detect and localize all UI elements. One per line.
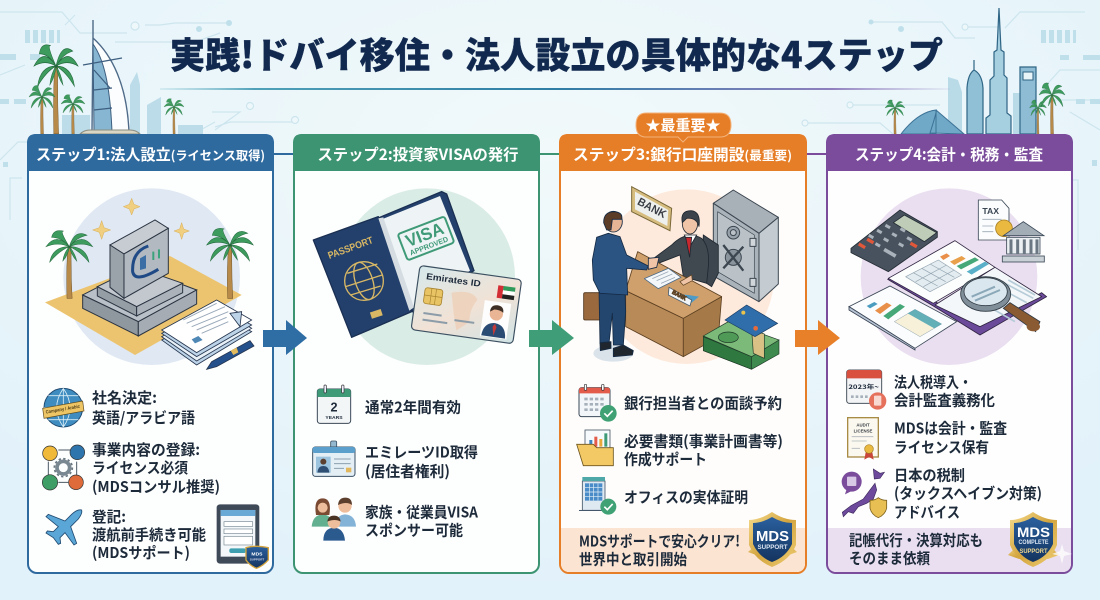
panel: step 1 xyxy=(27,134,274,573)
step 2 heading: ステップ2:投資家VISAの発行 xyxy=(318,143,518,165)
title underline xyxy=(160,88,950,90)
text: required documents: 作成サポート xyxy=(624,448,707,470)
badge: most important xyxy=(636,113,731,142)
text: business registration: ライセンス必須 xyxy=(92,457,188,478)
badge: MDS support: SUPPORT xyxy=(758,544,788,551)
title: 実践!ドバイ移住・法人設立の具体的な4ステップ xyxy=(170,27,943,79)
icon: corporate tax calendar xyxy=(847,370,886,410)
icon: calendar 2 years: 2 xyxy=(330,401,338,415)
vault xyxy=(713,190,778,302)
callout band: MDS support: 世界中と取引開始 xyxy=(579,548,687,570)
badge: MDS complete support xyxy=(1008,512,1072,567)
icon: corporate tax calendar: 2023年~ xyxy=(848,382,880,391)
text: company name: 社名決定: xyxy=(92,387,157,408)
icon: audit license: LICENSE xyxy=(854,428,872,433)
text: MDS audit license: ライセンス保有 xyxy=(894,436,989,458)
icon: business network xyxy=(42,445,85,490)
illustration: passport, visa and Emirates ID: PASSPORT xyxy=(327,235,375,262)
text: registration: (MDSサポート) xyxy=(92,542,190,563)
text: Japanese tax advice: アドバイス xyxy=(894,502,960,522)
callout band: complete support xyxy=(828,528,1071,572)
arrow: step 3 to 4 xyxy=(795,320,840,355)
badge: MDS support: MDS xyxy=(756,528,789,545)
right skyline xyxy=(885,8,1065,134)
money and cards xyxy=(703,305,779,369)
icon: calendar check xyxy=(579,384,617,422)
text: Emirates ID: エミレーツID取得 xyxy=(365,442,478,462)
icon: office building xyxy=(579,477,616,515)
tax document and bank: TAX xyxy=(982,206,999,216)
text: Japanese tax advice: 日本の税制 xyxy=(894,464,965,486)
text: MDS audit license: MDSは会計・監査 xyxy=(894,418,1007,438)
illustration: passport, visa and Emirates ID: Emirates ID xyxy=(426,271,482,289)
illustration: passport, visa and Emirates ID: VISA xyxy=(403,218,447,251)
badge: MDS complete support: COMPLETE xyxy=(1018,540,1048,546)
icon: tablet with badge: SUPPORT xyxy=(250,557,264,561)
icon: ID badge xyxy=(313,441,355,476)
text: company name: 英語/アラビア語 xyxy=(92,407,195,428)
callout band: MDS support: MDSサポートで安心クリア! xyxy=(579,530,740,552)
text: Japanese tax advice xyxy=(894,464,1042,522)
left skyline xyxy=(29,20,203,134)
icon: airplane xyxy=(46,510,82,545)
text: business registration: (MDSコンサル推奨) xyxy=(92,476,220,497)
illustration: passport, visa and Emirates ID xyxy=(313,188,522,365)
desk: BANK xyxy=(671,290,688,303)
callout band: MDS support xyxy=(561,528,805,572)
text: registration: 渡航前手続き可能 xyxy=(92,524,206,545)
text: required documents: 必要書類(事業計画書等) xyxy=(624,430,783,452)
badge: most important: ★最重要★ xyxy=(646,114,720,136)
illustration: company foundation stone xyxy=(45,188,254,369)
text: MDS audit license xyxy=(894,418,1007,458)
panel: step 2 xyxy=(293,134,540,573)
text: corporate tax xyxy=(894,372,995,410)
text: business registration xyxy=(92,439,220,497)
badge: MDS complete support: SUPPORT xyxy=(1020,548,1048,555)
badge: MDS complete support: MDS xyxy=(1017,524,1050,540)
icon: tablet with badge: MDS xyxy=(251,552,263,558)
icon: audit license: AUDIT xyxy=(856,423,870,428)
tax document and bank xyxy=(978,200,1044,262)
illustration: bank meeting xyxy=(584,187,779,369)
text: Japanese tax advice: (タックスヘイブン対策) xyxy=(894,482,1042,504)
icon: Japan map with shield xyxy=(842,469,887,518)
calculator xyxy=(851,210,937,272)
open book xyxy=(888,241,1047,335)
panel: step 3 xyxy=(559,134,807,573)
text: office proof: オフィスの実体証明 xyxy=(624,486,748,508)
step 3 heading: ステップ3:銀行口座開設(最重要) xyxy=(573,143,792,165)
icon: globe with ribbon: Company / Arabic xyxy=(45,404,81,415)
text: validity: 通常2年間有効 xyxy=(365,396,461,418)
icon: family and employees xyxy=(312,498,356,541)
illustration: passport, visa and Emirates ID: APPROVED xyxy=(408,234,450,257)
documents and pen xyxy=(162,300,254,369)
arrow: step 1 to 2 xyxy=(263,320,307,355)
magnifier xyxy=(961,277,1040,332)
text: bank appointment: 銀行担当者との面談予約 xyxy=(624,392,782,414)
text: company name xyxy=(92,387,195,428)
text: corporate tax: 法人税導入・ xyxy=(894,372,972,392)
arrow: step 2 to 3 xyxy=(529,320,574,355)
connector lines xyxy=(272,153,829,155)
text: corporate tax: 会計監査義務化 xyxy=(894,390,995,410)
text: registration xyxy=(92,506,206,563)
icon: folder with chart xyxy=(577,430,613,466)
icon: globe with ribbon xyxy=(43,388,84,427)
text: family VISA: スポンサー可能 xyxy=(365,520,463,540)
badge: MDS support xyxy=(748,512,797,567)
bank sign: BANK xyxy=(635,196,669,221)
customer xyxy=(584,211,659,362)
banker xyxy=(655,211,718,287)
step 4 heading: ステップ4:会計・税務・監査 xyxy=(855,143,1043,165)
text: Emirates ID: (居住者権利) xyxy=(365,460,450,482)
icon: audit license xyxy=(848,418,878,460)
desk xyxy=(626,252,722,357)
text: required documents xyxy=(624,430,783,470)
text: family VISA: 家族・従業員VISA xyxy=(365,502,478,522)
text: business registration: 事業内容の登録: xyxy=(92,439,200,460)
panel: step 4 xyxy=(826,134,1073,573)
callout band: complete support: 記帳代行・決算対応も xyxy=(849,530,983,550)
left report xyxy=(849,286,957,350)
bank sign xyxy=(632,187,672,231)
illustration: accounting books xyxy=(849,188,1047,365)
icon: calendar 2 years: YEARS xyxy=(325,415,343,421)
icon: calendar 2 years xyxy=(317,385,351,423)
icon: tablet with badge xyxy=(217,504,268,568)
text: registration: 登記: xyxy=(92,506,126,527)
step 1 heading: ステップ1:法人設立(ライセンス取得) xyxy=(36,143,265,165)
text: Emirates ID xyxy=(365,442,478,482)
callout band: complete support: そのまま依頼 xyxy=(849,548,930,568)
text: family VISA xyxy=(365,502,478,540)
